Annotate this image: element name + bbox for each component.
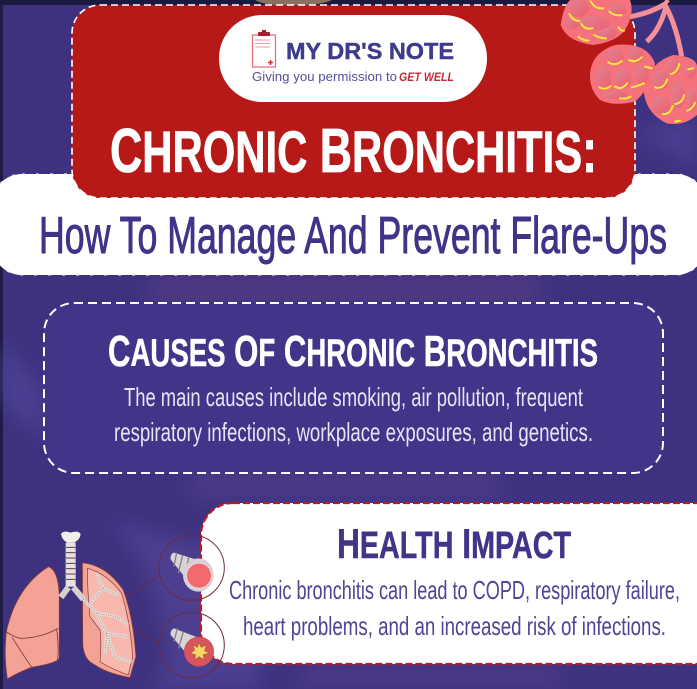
logo name: MY DR'S NOTE [286, 38, 454, 64]
bronchial tree [83, 573, 132, 662]
airway callout circles [125, 535, 224, 678]
icon: lungs with airway details [5, 532, 224, 679]
health body [229, 575, 680, 641]
causes heading: CAUSES OF CHRONIC BRONCHITIS [108, 327, 598, 376]
panel: causes [44, 303, 663, 473]
left lung [5, 567, 59, 679]
icon: inflamed airway [171, 628, 214, 666]
icon: healthy airway [171, 553, 214, 592]
trachea [61, 532, 81, 543]
right lung [82, 563, 136, 678]
title text: CHRONIC BRONCHITIS: [110, 117, 597, 186]
health heading: HEALTH IMPACT [337, 520, 571, 567]
icon: clipboard [252, 30, 276, 67]
logo pill: GET WELL [399, 72, 454, 84]
panel: health impact [201, 503, 697, 664]
panel: subtitle banner [0, 174, 697, 275]
logo pill [219, 15, 487, 102]
icon: alveoli clusters [561, 0, 697, 124]
causes body [114, 382, 593, 447]
logo tagline: Giving you permission to [252, 70, 397, 84]
panel: title card [72, 5, 635, 198]
